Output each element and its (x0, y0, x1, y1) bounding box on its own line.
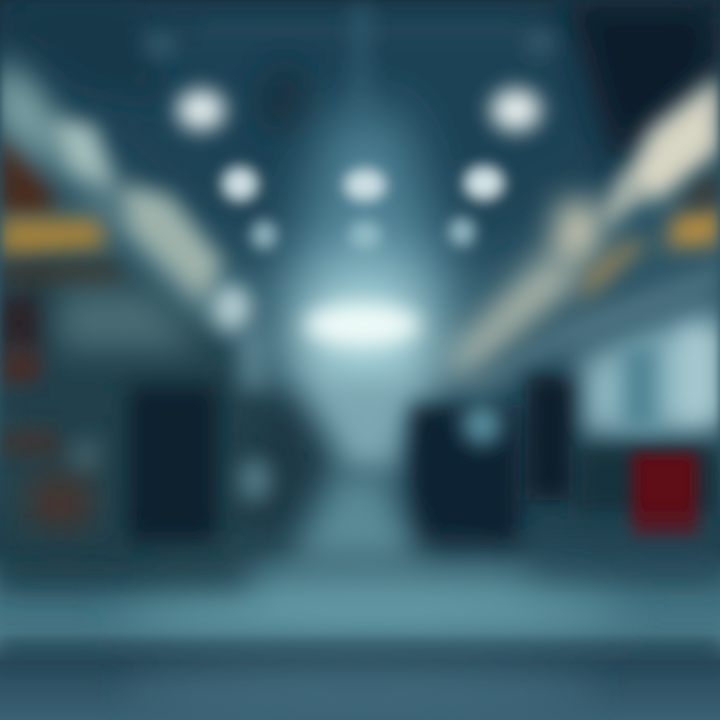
left ceiling beam (0, 55, 252, 332)
aisle (290, 475, 420, 560)
ceiling (0, 0, 720, 300)
ceiling lights (144, 32, 556, 249)
right wall (580, 305, 720, 435)
left shelving (0, 130, 260, 560)
floor (0, 530, 720, 712)
right ceiling beam (440, 75, 720, 395)
left dark racks (128, 330, 325, 550)
red container (632, 452, 698, 538)
right dark racks (410, 375, 720, 545)
central glow (285, 255, 445, 470)
